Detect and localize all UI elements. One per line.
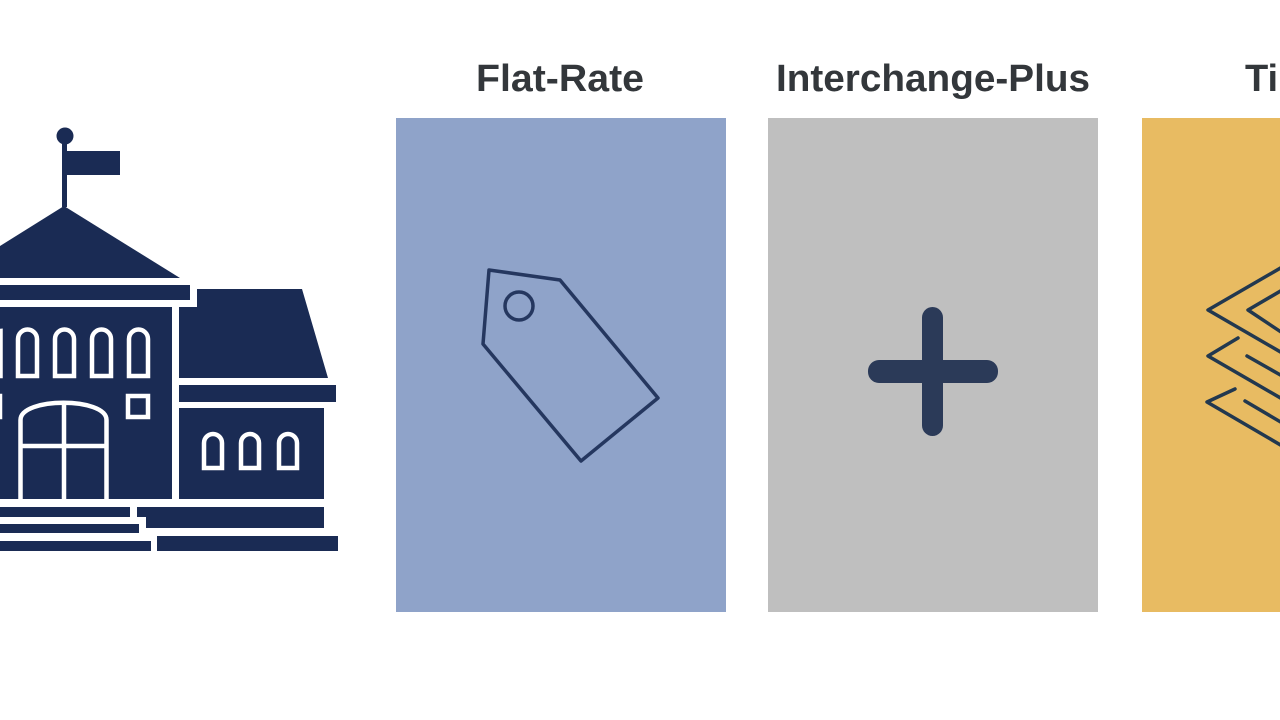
icon: stacked layers bbox=[1207, 266, 1280, 447]
flag and pole bbox=[56, 128, 120, 207]
panel: Interchange-Plus bbox=[768, 118, 1098, 612]
icon: school building bbox=[0, 128, 338, 551]
main roof bbox=[0, 206, 180, 278]
heading: Interchange-Plus: Interchange-Plus bbox=[776, 58, 1090, 100]
main hall bbox=[0, 307, 172, 500]
wing roof bbox=[179, 289, 328, 378]
heading: Flat-Rate: Flat-Rate bbox=[476, 58, 644, 100]
wing hall bbox=[179, 408, 324, 499]
wing cornice bbox=[179, 385, 336, 402]
panel: Flat-Rate bbox=[396, 118, 726, 612]
icon: plus sign bbox=[868, 307, 998, 436]
front steps bbox=[0, 507, 151, 551]
panel: Tiered bbox=[1142, 118, 1280, 612]
icon: price tag bbox=[483, 270, 658, 461]
wing plinth bbox=[137, 507, 338, 551]
main cornice bbox=[0, 285, 190, 300]
